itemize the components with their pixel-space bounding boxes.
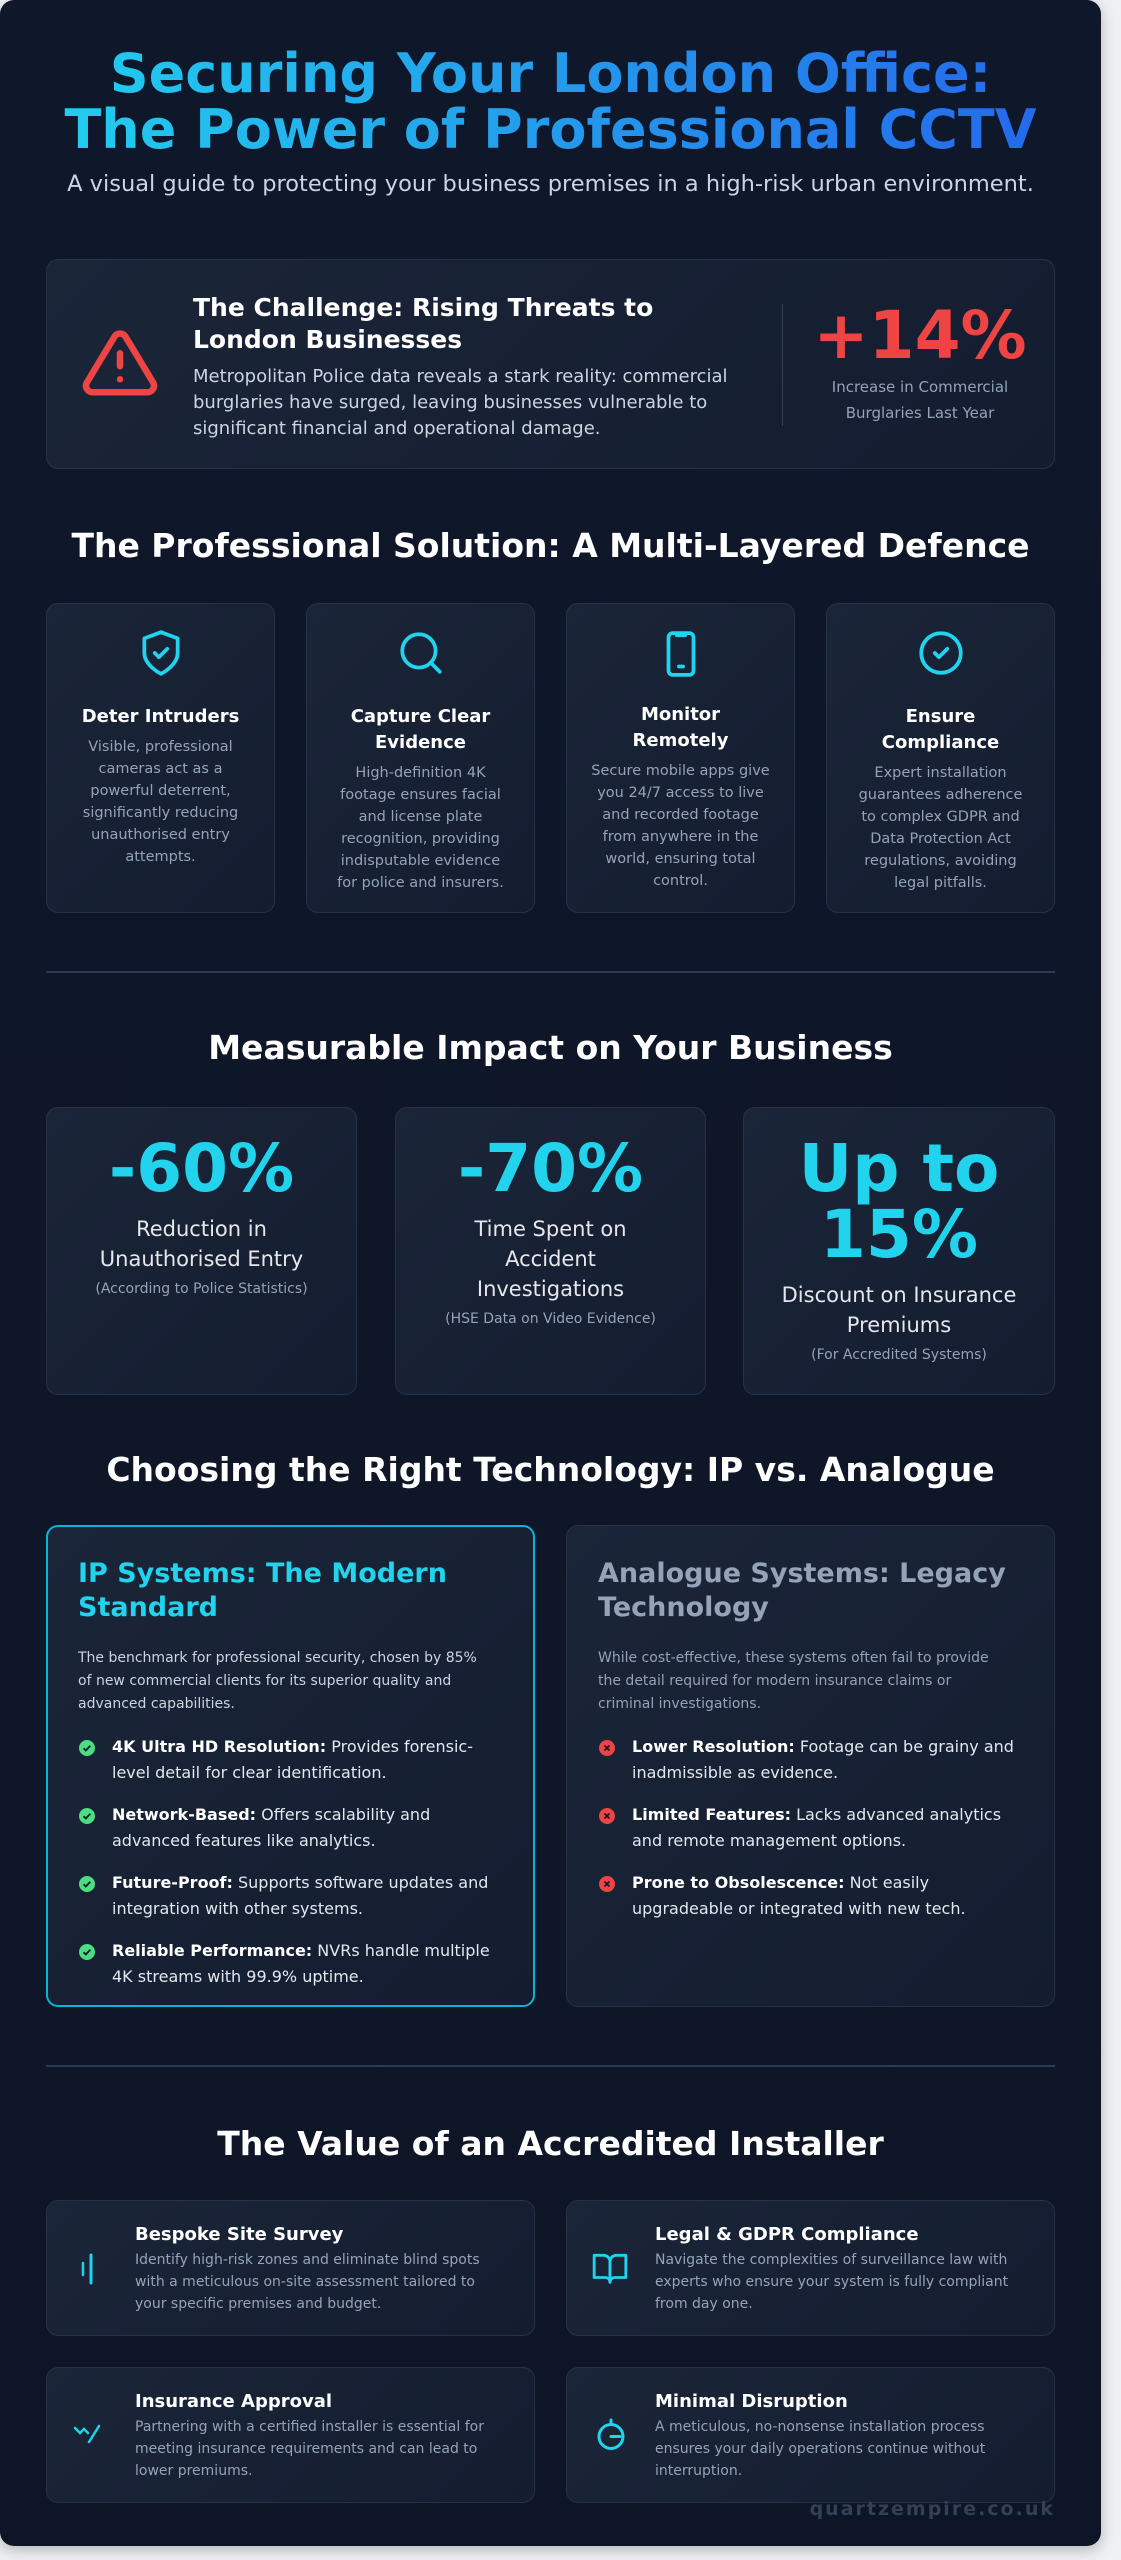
stat card: 15%: 15% xyxy=(820,1196,978,1273)
stat card: 15%: Discount on Insurance xyxy=(782,1283,1016,1307)
watermark: quartzempire.co.uk xyxy=(810,2498,1055,2520)
stat card: 15% xyxy=(743,1107,1055,1395)
card: evidence: High-definition 4K footage ensures facial and license plate recognition, providing indisputable evidence for police and insurers. xyxy=(337,765,504,891)
value card: survey: Bespoke Site Survey xyxy=(135,2224,343,2245)
heading: installer: The Value of an Accredited Installer xyxy=(217,2124,884,2163)
icon: warning xyxy=(82,330,158,396)
challenge text: Metropolitan Police data reveals a stark reality: commercial burglaries have surged, leaving businesses vulnerable to significant financial and operational damage. xyxy=(193,366,728,439)
panel: IP systems: IP Systems: The Modern Standard xyxy=(78,1558,447,1623)
stat card: 15%: Up to xyxy=(799,1130,999,1207)
card: compliance: Ensure Compliance xyxy=(882,706,999,753)
value card: legal: Legal & GDPR Compliance xyxy=(655,2224,919,2245)
heading: impact: Measurable Impact on Your Business xyxy=(208,1028,893,1067)
panel: analogue systems xyxy=(566,1525,1055,2007)
stat card: -70%: -70% xyxy=(458,1130,643,1207)
panel: analogue systems: While cost-effective, these systems often fail to provide the detail required for modern insurance claims or criminal investigations. xyxy=(598,1650,989,1712)
stat card: -70%: Time Spent on xyxy=(474,1217,627,1241)
title: The Power of Professional CCTV xyxy=(64,98,1037,161)
title xyxy=(0,46,1101,158)
value card: disruption xyxy=(566,2367,1055,2503)
item: Limited Features: Lacks advanced analytics and remote management options. xyxy=(632,1805,1001,1850)
panel: challenge xyxy=(46,259,1055,469)
card: monitor xyxy=(566,603,795,913)
challenge text xyxy=(193,293,728,439)
value card: insurance xyxy=(46,2367,535,2503)
card: evidence: Capture Clear Evidence xyxy=(351,706,490,753)
value card: insurance: Partnering with a certified installer is essential for meeting insurance requirements and can lead to lower premiums. xyxy=(135,2419,484,2479)
panel: analogue systems: Analogue Systems: Legacy Technology xyxy=(598,1558,1006,1623)
stat card: 15%: Premiums xyxy=(847,1313,951,1337)
stat card: -70%: Accident xyxy=(505,1247,596,1271)
value card: disruption: Minimal Disruption xyxy=(655,2391,848,2412)
panel: IP systems: The benchmark for professional security, chosen by 85% of new commercial clients for its superior quality and advanced capabilities. xyxy=(78,1650,477,1712)
stat card: -60%: -60% xyxy=(109,1130,294,1207)
item: Lower Resolution: Footage can be grainy and inadmissible as evidence. xyxy=(632,1737,1014,1782)
card: monitor: Secure mobile apps give you 24/7 access to live and recorded footage from anywhere in the world, ensuring total control. xyxy=(591,763,770,889)
stat card: -60% xyxy=(46,1107,357,1395)
subtitle: A visual guide to protecting your business premises in a high-risk urban environment. xyxy=(67,171,1034,197)
value card: legal: Navigate the complexities of surveillance law with experts who ensure your system is fully compliant from day one. xyxy=(655,2252,1008,2312)
card: evidence xyxy=(306,603,535,913)
card: compliance: Expert installation guarantees adherence to complex GDPR and Data Protection Act regulations, avoiding legal pitfalls. xyxy=(859,765,1022,891)
panel: stats xyxy=(46,1107,1055,1395)
panel: installer values xyxy=(46,2200,1055,2503)
stat: +14%: Increase in Commercial Burglaries Last Year xyxy=(832,378,1008,422)
heading: solution: The Professional Solution: A Multi-Layered Defence xyxy=(71,526,1030,565)
item: Future-Proof: Supports software updates and integration with other systems. xyxy=(112,1873,488,1918)
stat: +14% xyxy=(813,297,1027,422)
item: Network-Based: Offers scalability and advanced features like analytics. xyxy=(112,1805,430,1850)
stat card: -60%: Unauthorised Entry xyxy=(100,1247,303,1271)
card: deter: Visible, professional cameras act as a powerful deterrent, significantly reducing unauthorised entry attempts. xyxy=(83,739,238,865)
value card: survey: Identify high-risk zones and eliminate blind spots with a meticulous on-site assessment tailored to your specific premises and budget. xyxy=(135,2252,480,2312)
panel: features xyxy=(46,603,1055,913)
value card: insurance: Insurance Approval xyxy=(135,2391,332,2412)
value card: legal xyxy=(566,2200,1055,2336)
stat card: -60%: Reduction in xyxy=(136,1217,267,1241)
stat: +14%: +14% xyxy=(813,297,1027,374)
heading: technology: Choosing the Right Technology: IP vs. Analogue xyxy=(106,1450,995,1489)
stat card: -70%: Investigations xyxy=(477,1277,624,1301)
panel: IP systems xyxy=(46,1525,535,2007)
card: deter xyxy=(46,603,275,913)
item: Prone to Obsolescence: Not easily upgradeable or integrated with new tech. xyxy=(632,1873,966,1918)
card: deter: Deter Intruders xyxy=(82,706,239,727)
value card: disruption: A meticulous, no-nonsense installation process ensures your daily operations continue without interruption. xyxy=(655,2419,985,2479)
challenge text: The Challenge: Rising Threats to London Businesses xyxy=(193,293,653,354)
item: 4K Ultra HD Resolution: Provides forensic-level detail for clear identification. xyxy=(112,1737,473,1782)
card: compliance xyxy=(826,603,1055,913)
stat card: -60%: (According to Police Statistics) xyxy=(95,1281,308,1297)
stat card: -70%: (HSE Data on Video Evidence) xyxy=(445,1311,656,1327)
stat card: 15%: (For Accredited Systems) xyxy=(811,1347,987,1363)
card: monitor: Monitor Remotely xyxy=(633,704,728,751)
item: Reliable Performance: NVRs handle multiple 4K streams with 99.9% uptime. xyxy=(112,1941,490,1986)
value card: survey xyxy=(46,2200,535,2336)
title: Securing Your London Office: xyxy=(110,42,991,105)
stat card: -70% xyxy=(395,1107,706,1395)
